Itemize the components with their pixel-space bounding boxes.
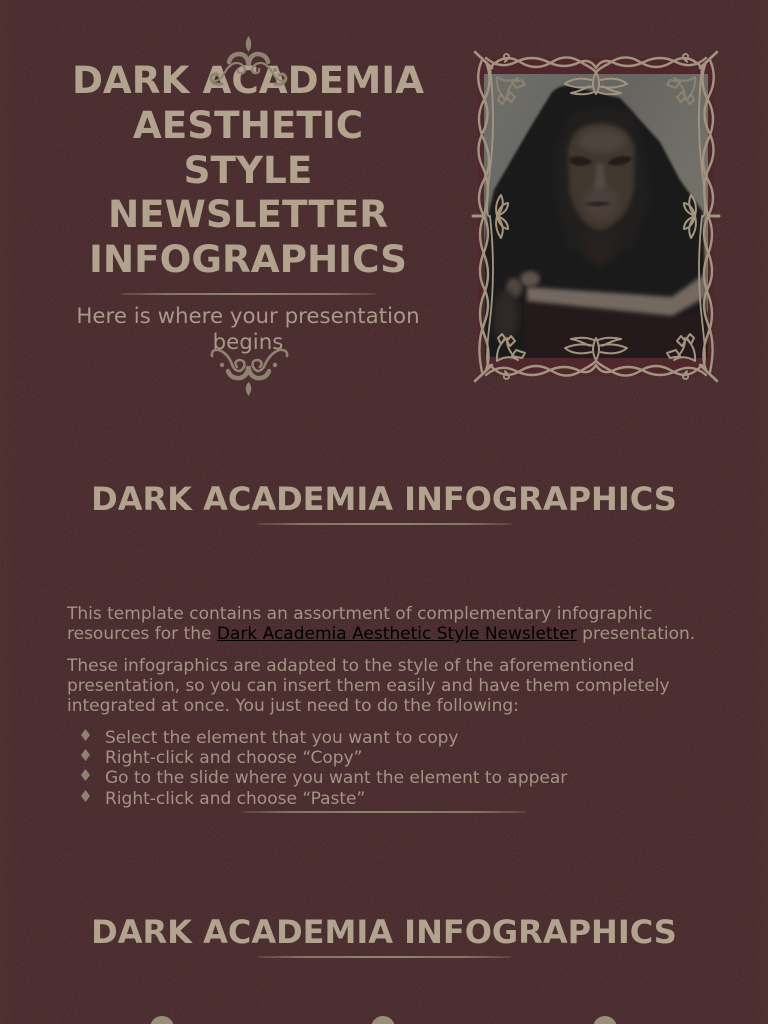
title: DARK ACADEMIA (72, 58, 424, 102)
section divider 2 (257, 956, 512, 958)
second paragraph: presentation, so you can insert them easily and have them completely (67, 676, 670, 696)
subtitle: begins (213, 330, 283, 355)
photo with ornate frame (472, 50, 720, 382)
intro paragraph: This template contains an assortment of complementary infographic (67, 604, 652, 624)
intro paragraph: resources for the Dark Academia Aesthetic Style Newsletter presentation. (67, 624, 695, 644)
photo (484, 74, 708, 360)
title (72, 58, 424, 281)
section heading 2: DARK ACADEMIA INFOGRAPHICS (91, 913, 677, 951)
frame braids (473, 52, 719, 381)
title: STYLE (184, 148, 312, 192)
title: INFOGRAPHICS (89, 237, 407, 281)
bullet list (81, 728, 568, 808)
second paragraph: integrated at once. You just need to do the following: (67, 696, 519, 716)
bullet list: Right-click and choose “Copy” (105, 748, 362, 768)
list divider (242, 811, 527, 813)
bullet list: Right-click and choose “Paste” (105, 788, 365, 808)
second paragraph (66, 656, 670, 716)
bullet list: Go to the slide where you want the element to appear (105, 768, 567, 788)
circle marker 3 (593, 1016, 617, 1024)
second paragraph: These infographics are adapted to the style of the aforementioned (67, 656, 634, 676)
title divider (120, 292, 376, 294)
title: AESTHETIC (133, 103, 363, 147)
frame flowers (496, 72, 696, 361)
subtitle (76, 304, 420, 355)
intro paragraph (66, 604, 695, 644)
circle marker 1 (150, 1016, 174, 1024)
frame backing (478, 58, 714, 376)
subtitle: Here is where your presentation (76, 304, 420, 329)
section divider 1 (257, 523, 512, 525)
bullet list: Select the element that you want to copy (105, 728, 458, 748)
title: NEWSLETTER (108, 192, 388, 236)
circle marker 2 (371, 1016, 395, 1024)
section heading 1: DARK ACADEMIA INFOGRAPHICS (91, 480, 677, 518)
